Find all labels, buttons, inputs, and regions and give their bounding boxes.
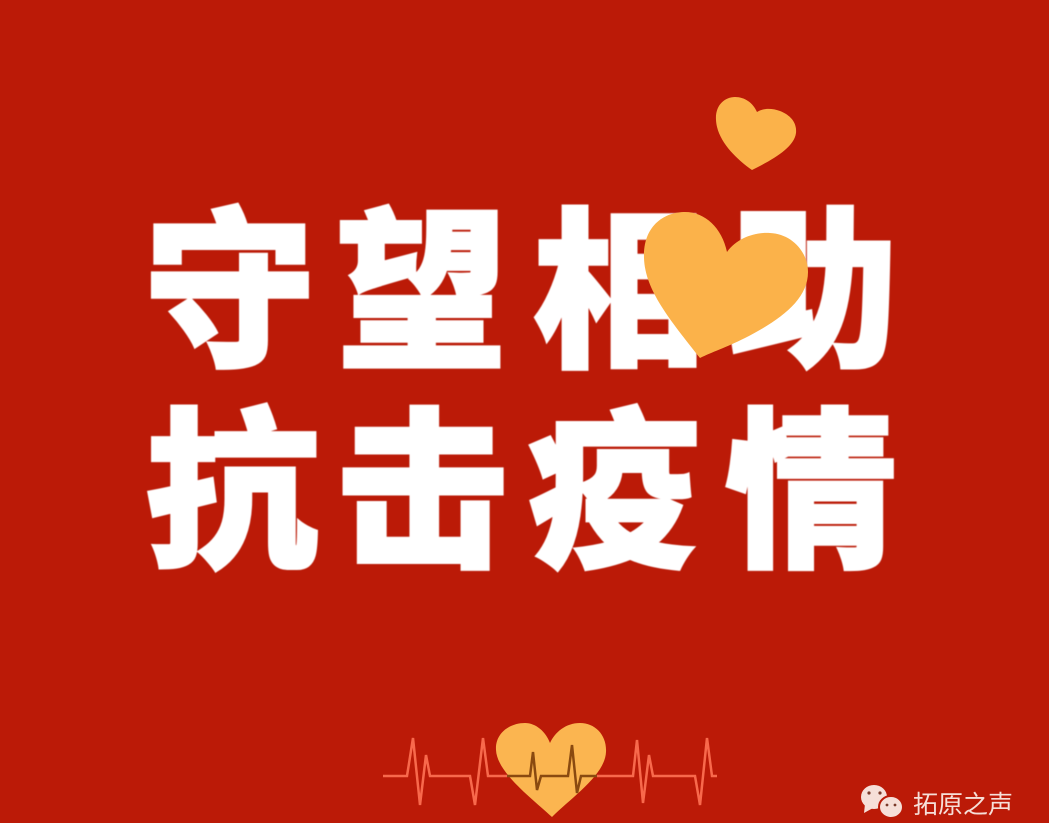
title line 2: 击 [337, 398, 509, 590]
icon: wechat bubbles [861, 785, 903, 818]
title line 1: 助 [727, 198, 899, 390]
title line 1 [144, 198, 899, 390]
watermark: wechat account [861, 785, 1013, 819]
account name: 拓原之声 [913, 791, 1013, 819]
icon: heartbeat heart [383, 723, 717, 817]
title line 2: 疫 [528, 398, 700, 590]
title line 1: 望 [336, 198, 508, 390]
title line 2 [146, 398, 897, 590]
title line 2: 情 [725, 398, 897, 590]
title line 2: 抗 [146, 398, 318, 590]
heartbeat line left [383, 738, 507, 805]
title line 1: 守 [144, 198, 316, 390]
icon: small heart top right [716, 97, 796, 170]
title line 1: 相 [533, 198, 705, 390]
heartbeat line inside heart [507, 745, 597, 793]
heartbeat line right [597, 738, 717, 805]
icon: large heart over title [644, 212, 808, 358]
